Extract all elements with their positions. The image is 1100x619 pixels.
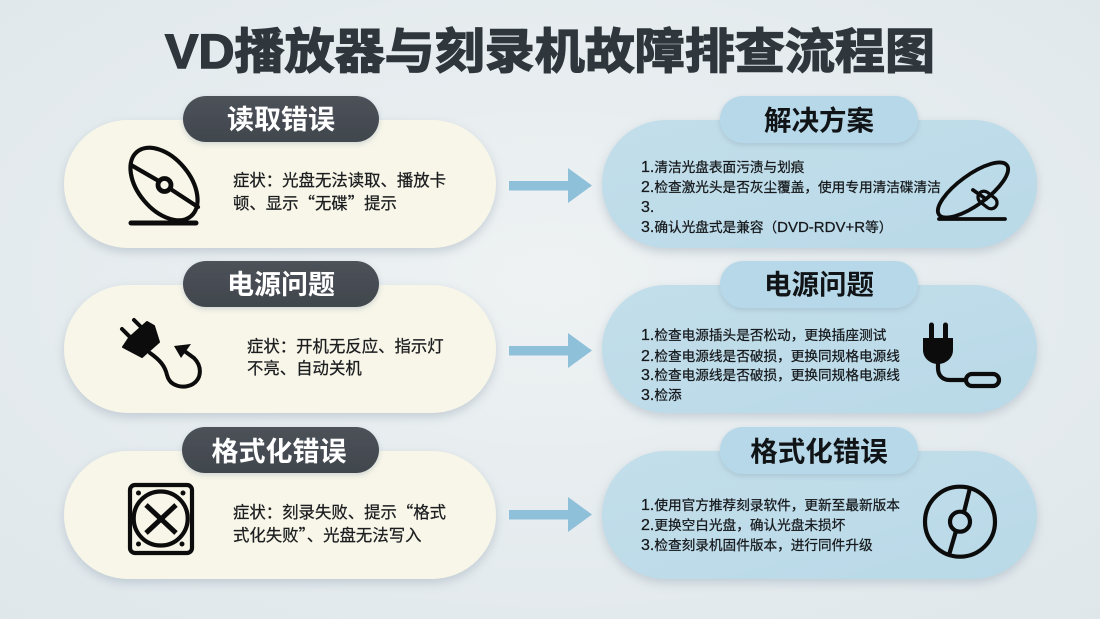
text: read error symptom: 顿、显示“无碟”提示 <box>233 190 397 214</box>
panel: format symptom <box>64 427 496 579</box>
text: format symptom <box>233 499 446 546</box>
text: power solution list <box>641 327 900 404</box>
text: solution list <box>641 159 941 236</box>
text: solution list: 3. <box>641 199 654 216</box>
text: power symptom: 不亮、自动关机 <box>247 360 362 378</box>
badge: read error: 读取错误 <box>227 105 335 135</box>
badge: format error: 格式化错误 <box>212 437 346 467</box>
text: power solution list: 2.检查电源线是否破损，更换同规格电源线 <box>641 348 900 365</box>
badge: power solution <box>720 261 918 308</box>
icon: disc on surface <box>930 153 1016 227</box>
icon: tilted disc <box>117 135 211 233</box>
text: format symptom: 式化失败”、光盘无法写入 <box>233 522 422 546</box>
panel: read error solution <box>602 96 1037 248</box>
text: power solution list: 3.检添 <box>641 387 682 404</box>
icon: plug with curved arrow <box>122 320 200 387</box>
text: read error symptom: 症状：光盘无法读取、播放卡 <box>233 171 446 190</box>
text: solution list: 2.检查激光头是否灰尘覆盖，使用专用清洁碟清洁 <box>641 179 941 196</box>
text: format solution list: 1.使用官方推荐刻录软件，更新至最新版本 <box>641 497 900 514</box>
text: format solution list: 2.更换空白光盘，确认光盘未损坏 <box>641 517 846 534</box>
icon: plug <box>923 325 999 386</box>
text: power solution list: 3.检查电源线是否破损，更换同规格电源线 <box>641 367 900 384</box>
badge: read error <box>183 96 379 142</box>
text: power solution list: 1.检查电源插头是否松动，更换插座测试 <box>641 327 887 344</box>
arrow: read error to solution <box>509 168 592 203</box>
badge: solution <box>720 96 918 143</box>
arrow: format to solution <box>509 497 592 532</box>
badge: power solution: 电源问题 <box>764 269 874 300</box>
text: solution list: 3.确认光盘式是兼容（DVD-RDV+R等） <box>641 219 892 236</box>
badge: format solution: 格式化错误 <box>750 436 888 467</box>
panel: read error symptom <box>64 96 496 248</box>
icon: crossed fan <box>130 485 192 553</box>
badge: solution: 解决方案 <box>764 105 874 136</box>
badge: format error <box>182 427 379 473</box>
title: VD播放器与刻录机故障排查流程图 <box>165 26 935 79</box>
icon: disc <box>925 487 995 557</box>
badge: format solution <box>720 427 918 474</box>
badge: power <box>183 261 379 307</box>
text: solution list: 1.清洁光盘表面污渍与划痕 <box>641 159 805 176</box>
text: power symptom: 症状：开机无反应、指示灯 <box>247 337 444 356</box>
text: format symptom: 症状：刻录失败、提示“格式 <box>233 499 446 523</box>
text: power symptom <box>247 337 444 378</box>
arrow: power to solution <box>509 333 592 368</box>
text: read error symptom <box>233 171 446 214</box>
panel: power symptom <box>64 261 496 413</box>
text: format solution list <box>641 497 900 554</box>
panel: format solution <box>602 427 1037 579</box>
text: format solution list: 3.检查刻录机固件版本，进行同件升级 <box>641 537 873 554</box>
panel: power solution <box>602 261 1037 413</box>
badge: power: 电源问题 <box>227 270 335 300</box>
